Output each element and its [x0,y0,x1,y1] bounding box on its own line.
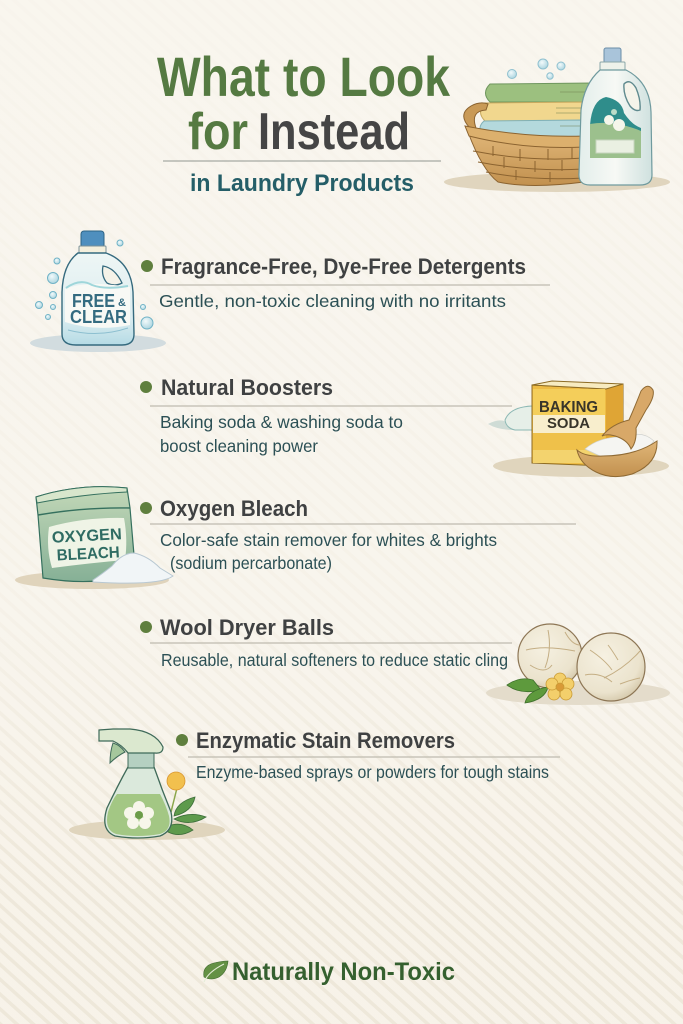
basket [464,103,585,186]
title line one: What to Look [157,45,451,108]
heading: Wool Dryer Balls [160,615,334,640]
box label: BAKING [539,399,598,416]
jar label [51,526,123,565]
icon: spray bottle with flower [69,729,225,840]
description: Color-safe stain remover for whites & brights [160,530,497,550]
jar label: BLEACH [56,544,120,565]
heading: Natural Boosters [161,375,333,400]
box label: SODA [547,415,590,432]
description: (sodium percarbonate) [170,553,332,573]
footer brand [204,958,455,986]
item 5: enzymatic stain removers [69,728,560,840]
description: Gentle, non-toxic cleaning with no irritants [159,291,506,311]
powder [585,434,654,456]
subtitle: in Laundry Products [190,170,414,197]
jar label: OXYGEN [51,526,122,547]
description: boost cleaning power [160,436,318,456]
leaves [507,679,541,692]
bottle label: CLEAR [70,307,127,327]
icon: leaf [204,961,228,982]
description [160,412,403,456]
bowl [577,441,657,477]
box label [539,399,598,432]
item 4: wool dryer balls [140,615,670,705]
bubbles [508,59,565,79]
title line two: Instead [258,103,410,161]
description: Baking soda & washing soda to [160,412,403,432]
description: Enzyme-based sprays or powders for tough stains [196,762,549,782]
bottle label: FREE [72,291,115,311]
bullet [140,381,152,393]
icon: wool balls with flower [486,624,670,705]
bullet [141,260,153,272]
icon: oxygen bleach jar and powder [15,487,173,589]
title line two [188,103,410,161]
icon: free and clear bottle with bubbles [30,231,166,352]
item 1: fragrance-free detergents [30,231,550,352]
bottle flower [124,801,154,829]
plant [167,772,206,835]
heading: Fragrance-Free, Dye-Free Detergents [161,254,526,279]
item 3: oxygen bleach [15,487,576,589]
towels [480,83,592,138]
illustration: laundry basket and detergent bottle [444,48,670,192]
bullet [140,621,152,633]
trigger head [99,729,163,753]
title block [157,45,451,197]
flower [546,673,574,700]
title line two: for [188,103,248,161]
bottle label: & [118,297,126,309]
bottle label [70,291,127,327]
bullet [140,502,152,514]
heading: Oxygen Bleach [160,496,308,521]
item 2: natural boosters [140,375,669,477]
description: Reusable, natural softeners to reduce static cling [161,650,508,670]
scoop [602,386,653,449]
bullet [176,734,188,746]
brand name: Naturally Non-Toxic [232,958,455,986]
bottle [579,48,652,185]
description [160,530,497,573]
icon: baking soda box and bowl [488,381,669,477]
bottle body [105,767,172,838]
heading: Enzymatic Stain Removers [196,728,455,753]
